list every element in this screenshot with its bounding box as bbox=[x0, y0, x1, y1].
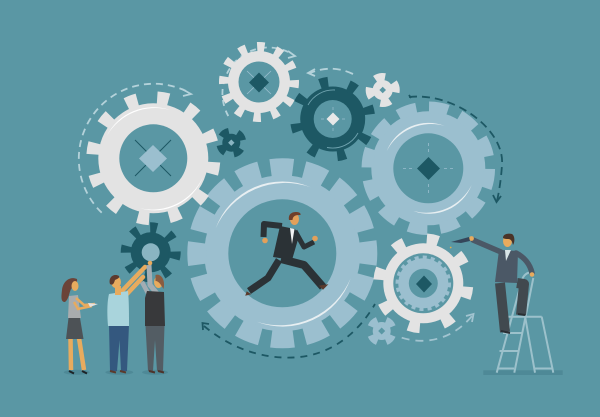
dark gear held by team bbox=[127, 228, 175, 276]
dark dashed arc around right gear bbox=[409, 95, 502, 202]
light dashed arc below gear bbox=[402, 314, 474, 341]
dashed arc around small white gear bbox=[222, 47, 295, 116]
small white gear bbox=[223, 46, 295, 118]
dashed arc around white gear bbox=[79, 84, 191, 213]
small white cog bbox=[365, 73, 400, 107]
woman with paper bbox=[61, 278, 98, 375]
running businessman bbox=[246, 212, 327, 295]
dashed arc above dark gear bbox=[308, 69, 353, 76]
right blue gear bbox=[366, 106, 490, 230]
man in light blue shirt bbox=[105, 267, 145, 375]
big blue gear bbox=[186, 157, 378, 349]
small blue cog bbox=[367, 317, 396, 345]
man on ladder with oil can bbox=[450, 234, 534, 333]
large white gear bbox=[89, 94, 217, 222]
ladder bbox=[483, 272, 563, 375]
small dark cog bbox=[216, 128, 246, 158]
white gear with inner blue gear bbox=[376, 236, 471, 331]
dark gear bbox=[286, 72, 379, 166]
dark dashed arc below big gear bbox=[202, 304, 375, 358]
man in dark vest bbox=[142, 261, 168, 375]
